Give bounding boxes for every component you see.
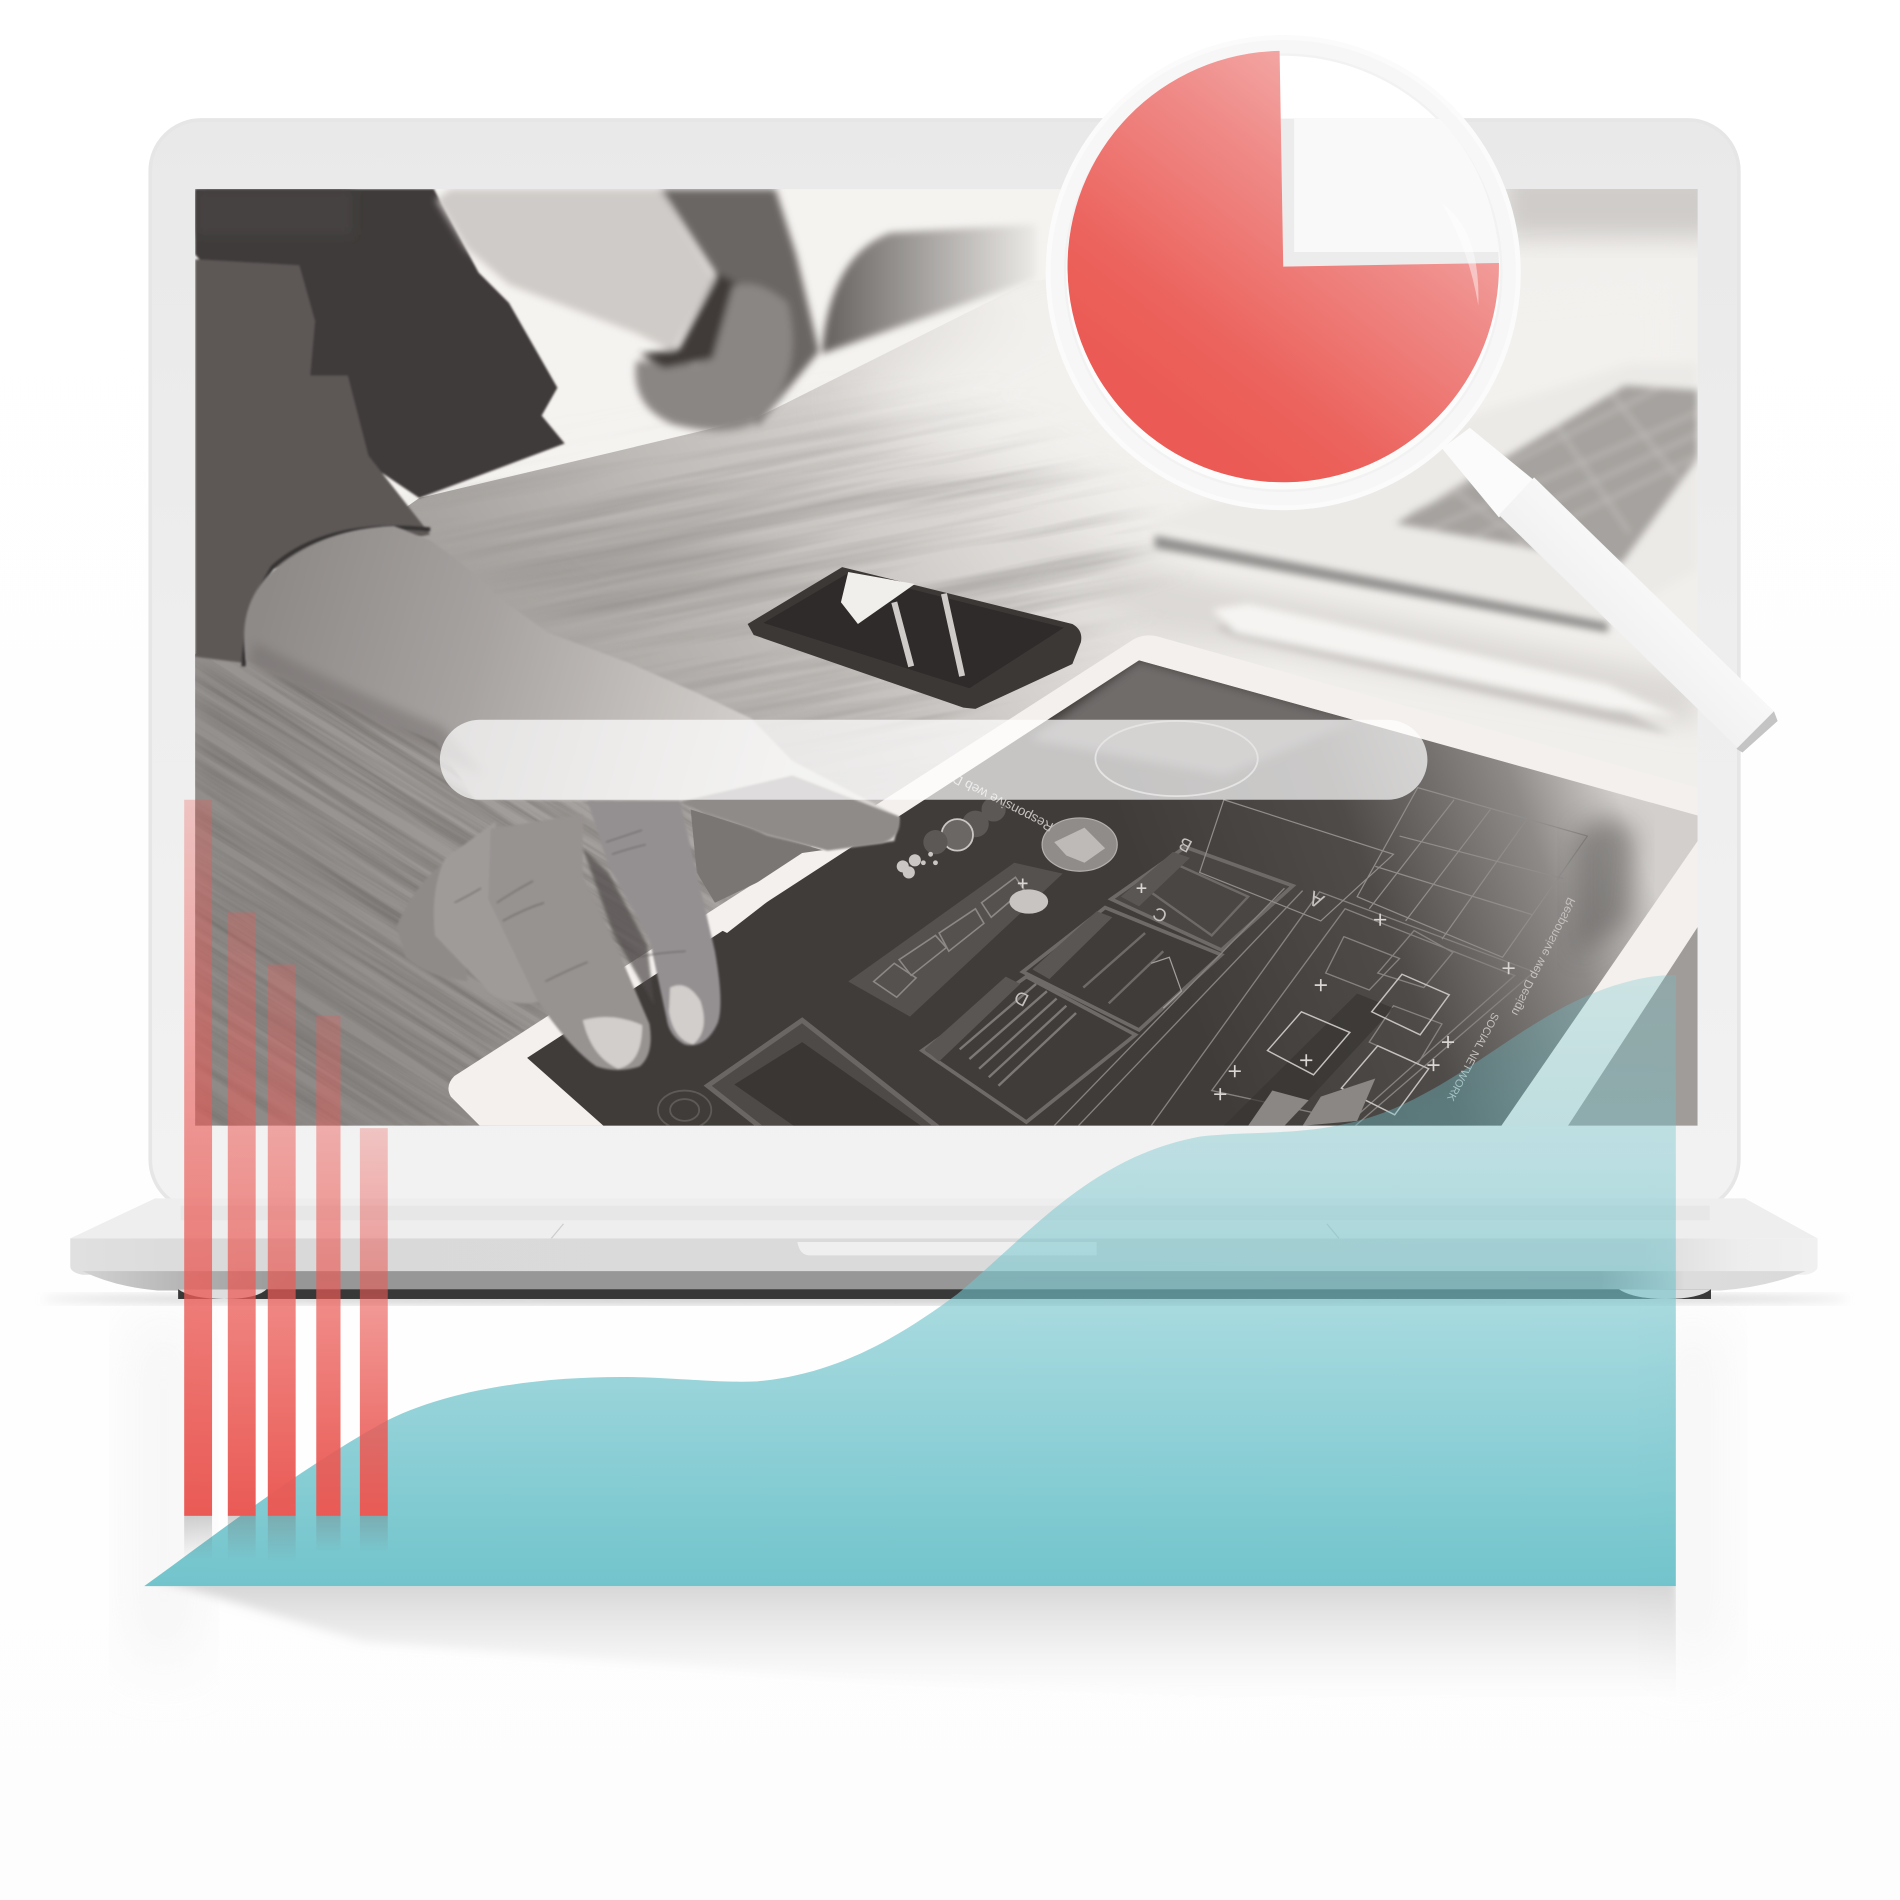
magnifying glass — [1048, 38, 1778, 752]
panel C — [1023, 908, 1221, 1030]
bar 5 — [360, 1128, 388, 1516]
pie light quarter — [1281, 119, 1515, 279]
laptop base top face — [70, 1198, 1818, 1238]
panel D — [922, 977, 1135, 1122]
forearm on table — [244, 526, 899, 849]
lens outer rim — [1048, 38, 1518, 508]
bar 3 — [268, 965, 296, 1516]
hand fingers — [396, 776, 900, 1070]
dot icons — [897, 852, 938, 879]
blurred chair — [822, 224, 1036, 354]
shirt top lighter band — [195, 189, 353, 235]
cloud icon — [1009, 889, 1048, 914]
letters on tablet: B — [1175, 833, 1195, 856]
phone reflection — [841, 572, 915, 624]
middle finger — [488, 814, 651, 1070]
lens glass — [1051, 40, 1516, 505]
letters on tablet — [922, 756, 1578, 1103]
thumb — [679, 776, 900, 851]
forearm and hand back — [244, 526, 899, 849]
handle cap — [1736, 711, 1778, 752]
letters on tablet: Responsive web Design — [922, 756, 1056, 835]
wood grain upper table — [438, 412, 1154, 720]
person shirt and arm group — [195, 189, 565, 666]
wood grain lower left — [195, 660, 748, 1126]
top sleeve — [660, 189, 819, 427]
laptop screen photo — [195, 189, 1698, 1126]
bar 1 — [184, 800, 212, 1516]
quarter panel — [1294, 119, 1506, 252]
index finger — [588, 801, 720, 1045]
nail middle — [583, 1017, 642, 1069]
laptop base front face — [70, 1238, 1818, 1275]
handle — [1499, 477, 1774, 749]
upper right grids — [1200, 788, 1587, 957]
translucent search bar — [440, 720, 1427, 800]
shirt sleeve — [195, 259, 430, 663]
globe — [1042, 818, 1117, 871]
watch — [640, 274, 734, 368]
interface upper reflection — [1030, 660, 1357, 776]
blurred background laptop — [1145, 364, 1698, 633]
phone stripes — [894, 594, 962, 676]
tablet edge strip near fingers — [700, 848, 836, 933]
tablet frame — [448, 635, 1698, 1126]
forearm underside shading — [248, 642, 485, 776]
red bar chart — [184, 800, 388, 1562]
keyboard strip — [181, 1206, 1710, 1220]
blurred pencil — [1212, 603, 1678, 734]
letters on tablet: Responsive web Design — [1507, 895, 1578, 1017]
desk band — [1092, 568, 1698, 727]
shadow between fingers — [583, 848, 654, 1006]
nail index — [669, 985, 704, 1045]
panel left rounded — [848, 863, 1063, 1017]
palm — [436, 189, 715, 351]
panel A dark diagonal band — [1224, 994, 1393, 1126]
bezel corner band — [1281, 119, 1515, 279]
lens highlight — [1442, 204, 1478, 305]
letters on tablet: C — [1150, 903, 1170, 927]
phone — [748, 567, 1081, 709]
panel A bright squares — [1267, 974, 1449, 1115]
lens ring — [1055, 45, 1511, 500]
right foot — [1619, 1289, 1711, 1299]
letters on tablet: D — [1011, 987, 1032, 1010]
letters on tablet: A — [1305, 886, 1328, 913]
finger creases — [454, 830, 686, 982]
lens faint edge — [1065, 55, 1501, 491]
table surface — [195, 307, 1214, 1126]
trackpad lines — [551, 1224, 1339, 1238]
shirt body — [195, 189, 565, 498]
lower left mini panel — [708, 1020, 945, 1139]
panel A outlines — [1054, 888, 1534, 1145]
blurred figure reflection — [1575, 818, 1636, 957]
sleeve cuff — [244, 528, 430, 666]
letters on tablet: SOCIAL NETWORK — [1444, 1010, 1501, 1103]
plus marks — [1018, 879, 1515, 1100]
phone body — [748, 567, 1081, 709]
bar reflections — [184, 1516, 388, 1562]
handle neck — [1442, 428, 1536, 517]
blurred top hand — [436, 189, 819, 431]
left foot — [178, 1289, 267, 1299]
panel B — [1111, 847, 1293, 950]
phone screen — [763, 573, 1064, 688]
wrist — [635, 284, 793, 431]
ring finger — [434, 822, 543, 1003]
globe continents — [1054, 828, 1105, 863]
underside dark line — [178, 1289, 1711, 1299]
upper table highlight — [877, 357, 1062, 458]
chart and laptop soft shadows — [42, 1294, 1848, 1702]
target circles — [658, 1091, 711, 1129]
wood right of tablet — [1568, 927, 1698, 1126]
bar 2 — [228, 912, 256, 1516]
laptop lid — [150, 120, 1739, 1211]
photo background — [196, 189, 1060, 504]
pie chart — [1068, 51, 1499, 482]
trackpad notch — [797, 1242, 1097, 1255]
laptop underside — [82, 1271, 1805, 1290]
panel left boxes — [874, 877, 1024, 997]
bar 4 — [316, 1015, 340, 1516]
sticky notes — [1248, 1078, 1375, 1126]
tablet interface — [658, 660, 1636, 1145]
dial circle — [1095, 721, 1258, 796]
teal area chart — [144, 975, 1676, 1586]
little finger — [396, 859, 468, 982]
tablet screen — [527, 660, 1698, 1126]
icon circles row — [923, 797, 1006, 854]
back wall blur — [1506, 189, 1698, 246]
keyboard — [1396, 385, 1698, 563]
laptop front edge — [1155, 536, 1608, 633]
laptop — [70, 120, 1818, 1299]
wood gap between fingers — [691, 809, 824, 903]
